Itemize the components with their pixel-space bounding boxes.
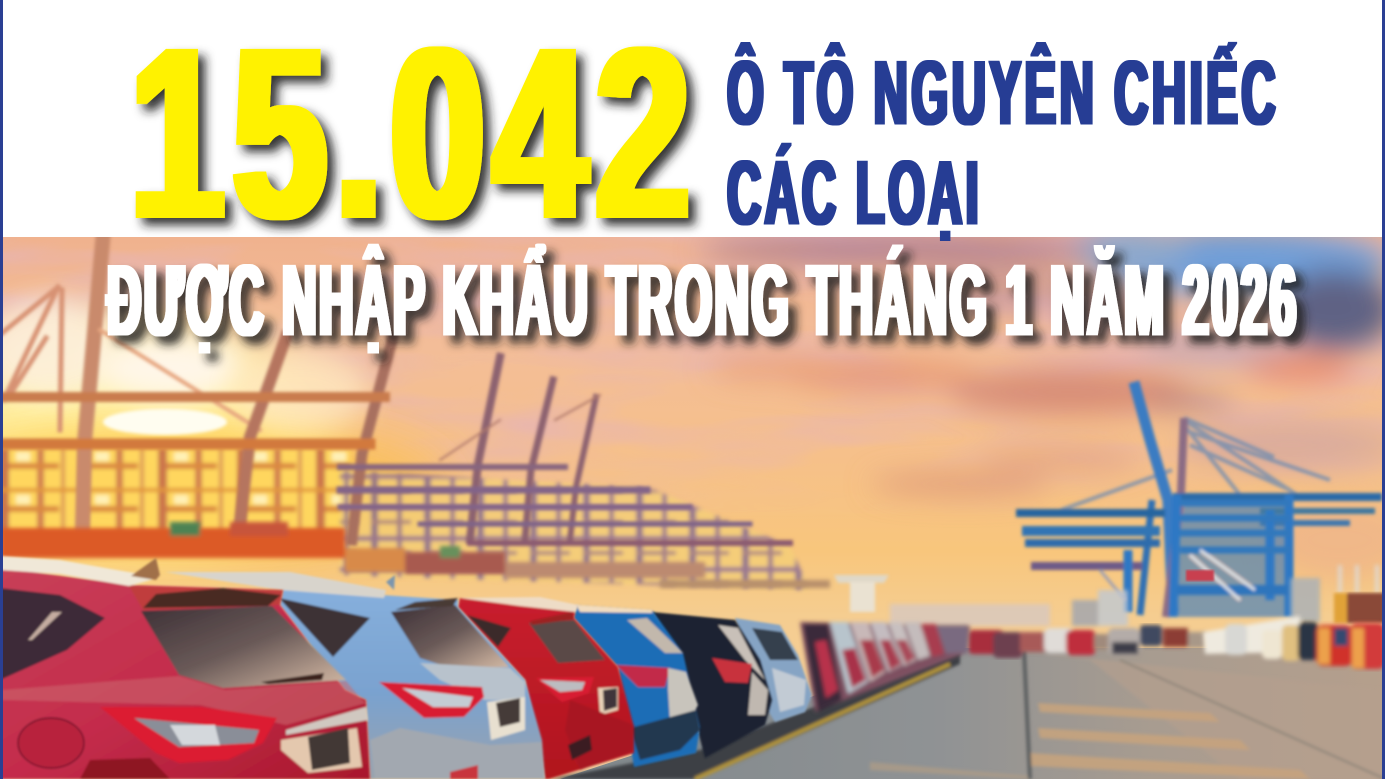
- left crane lattice: [0, 448, 810, 590]
- stacked container right: [1334, 593, 1385, 623]
- left port cranes: [0, 237, 790, 545]
- car 4 blue: [574, 605, 700, 767]
- big number 15.042: 15.042: [130, 0, 690, 269]
- sun glow: [0, 300, 440, 560]
- crane red detail: [1186, 570, 1214, 581]
- distant cars centre: [968, 625, 1206, 658]
- car 3 red: [458, 597, 634, 779]
- car 5 dark: [652, 612, 772, 758]
- heading line 1: Ô TÔ NGUYÊN CHIẾC: [727, 42, 1276, 144]
- concrete ground: [550, 648, 1385, 779]
- car 1 red: [0, 556, 370, 779]
- right blue crane: [1016, 382, 1382, 617]
- car 6 silver blue: [735, 618, 812, 722]
- car 2 silver blue: [165, 572, 545, 779]
- row of cars right: [1203, 616, 1385, 669]
- port control tower: [834, 575, 889, 612]
- row of distant cars left: [800, 622, 970, 712]
- distant buildings: [890, 565, 1379, 626]
- subheading over photo: ĐƯỢC NHẬP KHẨU TRONG THÁNG 1 NĂM 2026: [107, 243, 1296, 357]
- sky: [0, 237, 1385, 779]
- clouds: [0, 228, 1385, 580]
- quayside containers: [0, 522, 830, 588]
- sun patch: [103, 409, 227, 435]
- left frame border: [0, 0, 3, 779]
- heading line 2: CÁC LOẠI: [727, 142, 979, 244]
- white header background: [0, 0, 1385, 237]
- right frame border: [1382, 0, 1385, 779]
- background photo: port at sunset: [0, 228, 1385, 779]
